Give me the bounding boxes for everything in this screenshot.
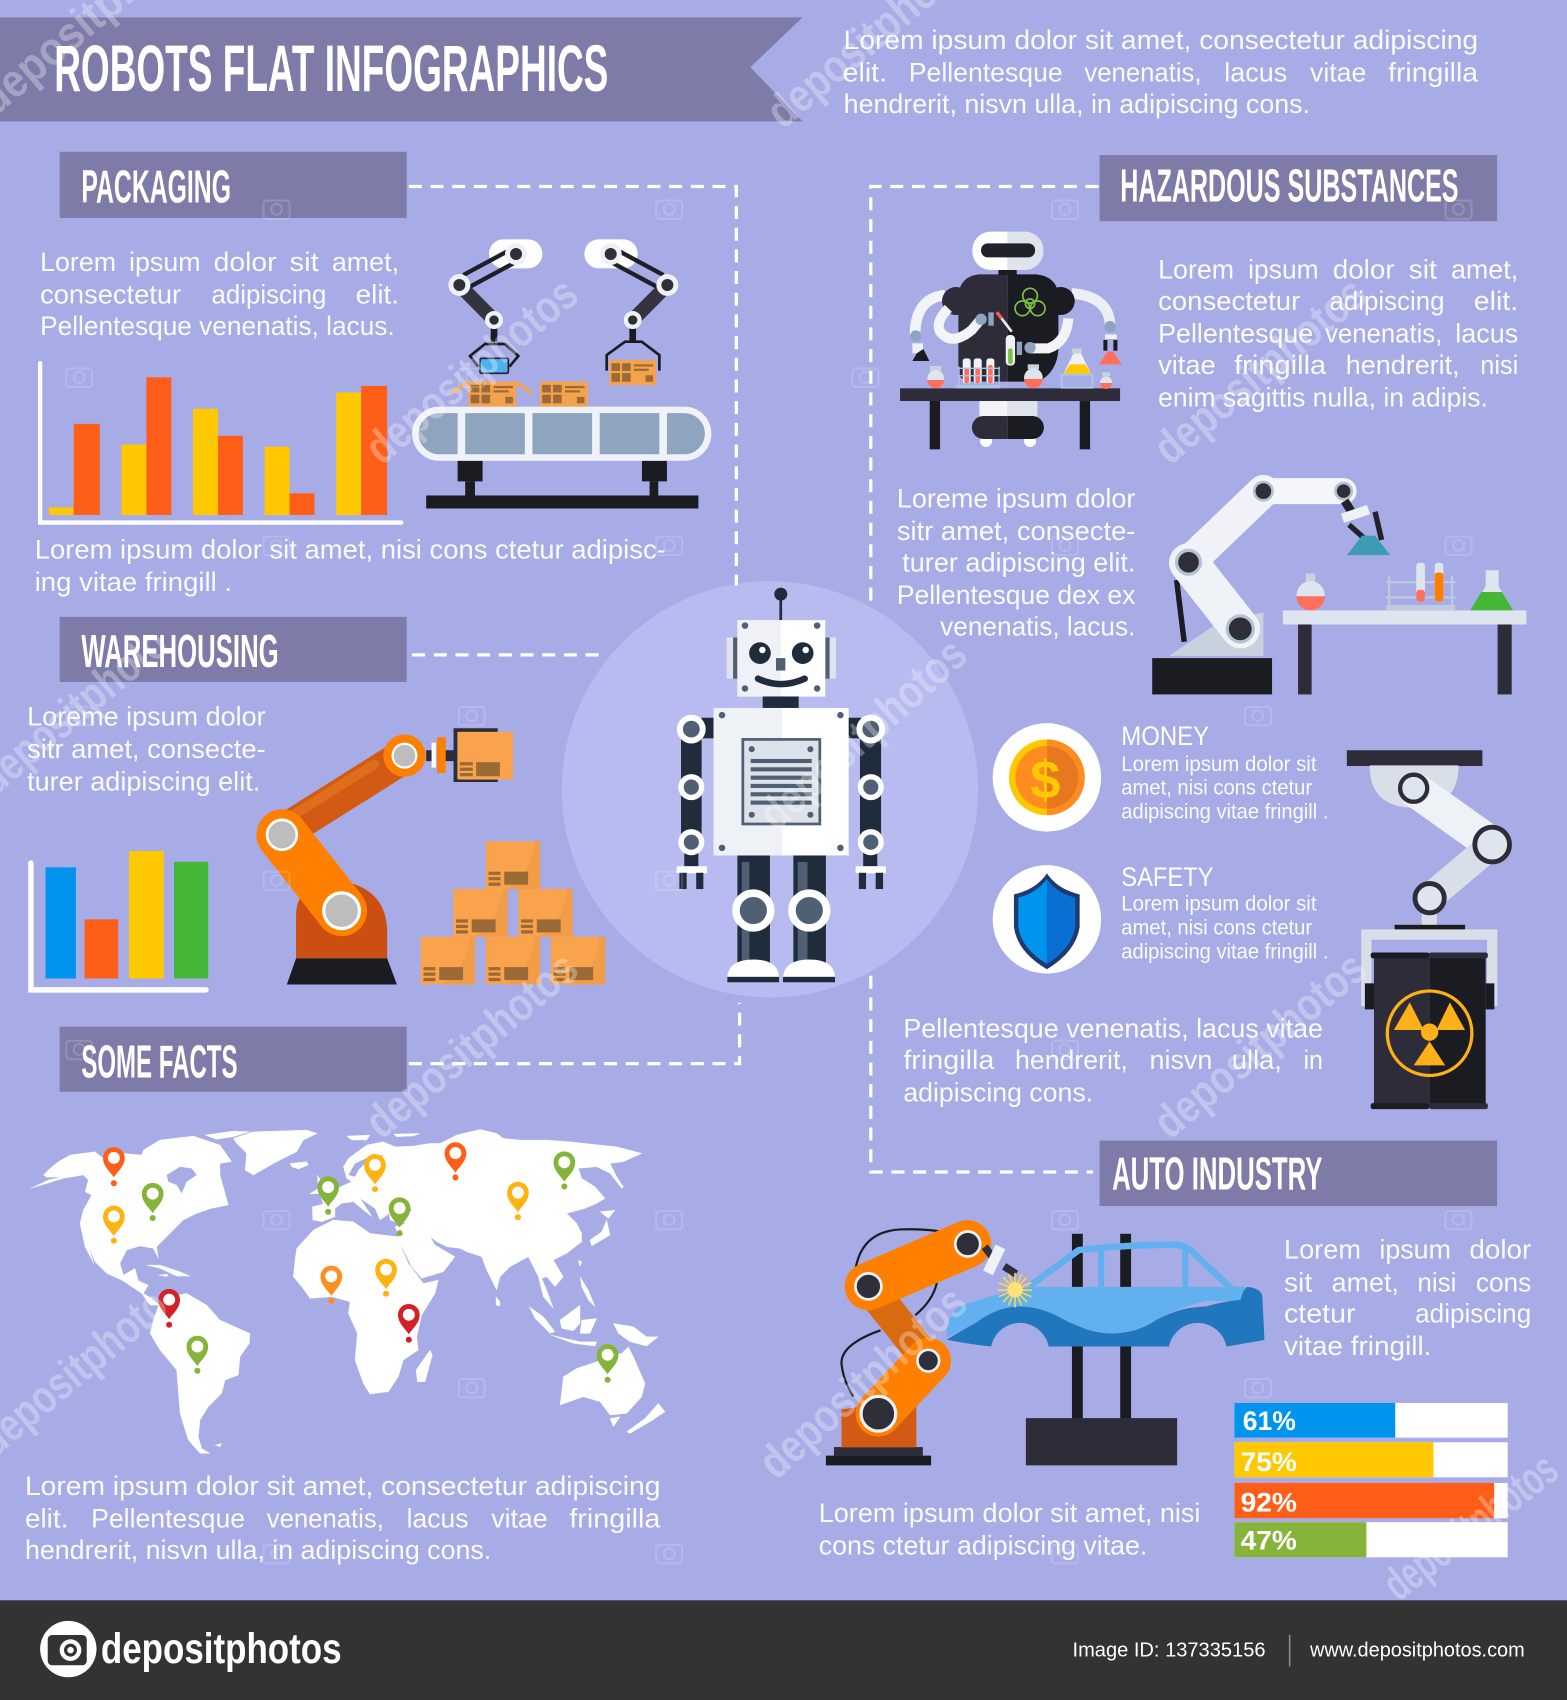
hazardous text: vitae: [1158, 349, 1216, 380]
intro text block: hendrerit, nisvn ulla, in adipiscing cons.: [844, 88, 1310, 119]
welding spark: [998, 1273, 1032, 1308]
hazardous text: consectetur: [1158, 285, 1300, 316]
safety paragraph: in: [1303, 1044, 1323, 1075]
hazardous text: Lorem: [1158, 254, 1234, 285]
intro text block: venenatis,: [1084, 56, 1202, 87]
auto text: [1284, 1234, 1531, 1361]
packaging caption: [35, 533, 666, 597]
auto text: vitae fringill.: [1284, 1330, 1431, 1361]
packaging text: [40, 246, 399, 341]
hazardous secondary text: turer adipiscing elit.: [902, 546, 1135, 577]
some facts heading: SOME FACTS: [81, 1036, 237, 1088]
facts text: [25, 1470, 661, 1565]
footer url: www.depositphotos.com: [1309, 1640, 1525, 1662]
percentage bars: [1234, 1403, 1508, 1557]
safety paragraph: adipiscing cons.: [903, 1077, 1093, 1108]
panel: hazardous substances: [897, 155, 1526, 694]
packaging text: sit: [290, 246, 319, 277]
facts text: Pellentesque: [91, 1503, 245, 1534]
safety paragraph: hendrerit,: [1015, 1044, 1128, 1075]
car body: [947, 1245, 1264, 1347]
packaging heading: [60, 152, 407, 218]
stock watermarks: depositphotos: [355, 941, 588, 1148]
hazardous text: dolor: [1333, 254, 1395, 285]
stock watermarks: depositphotos: [1143, 267, 1376, 474]
intro text block: lacus: [1224, 56, 1287, 87]
hazardous text: adipiscing: [1330, 285, 1444, 316]
footer divider: [1289, 1635, 1290, 1666]
map: americas: [31, 1130, 317, 1453]
robot torso: [714, 708, 849, 855]
auto caption: Lorem ipsum dolor sit amet, nisi: [819, 1497, 1200, 1528]
facts text: fringilla: [569, 1503, 661, 1534]
robot legs: [727, 855, 835, 982]
auto text: ipsum: [1379, 1234, 1451, 1265]
safety text: amet, nisi cons ctetur: [1121, 917, 1312, 940]
safety paragraph: ulla,: [1232, 1044, 1282, 1075]
lab robot: [910, 232, 1122, 447]
panel: auto industry: [819, 1141, 1531, 1561]
safety paragraph: Pellentesque venenatis, lacus vitae: [903, 1013, 1323, 1044]
hazardous text: Pellentesque: [1158, 318, 1313, 349]
facts text: hendrerit, nisvn ulla, in adipiscing cons.: [25, 1534, 491, 1565]
auto caption: [819, 1497, 1200, 1561]
panel: packaging: [35, 152, 708, 597]
auto text: sit: [1284, 1266, 1313, 1297]
stock watermarks: depositphotos: [1143, 941, 1376, 1148]
warehousing bar chart: [31, 851, 208, 990]
safety text: SAFETY: [1121, 861, 1213, 892]
panel: warehousing: [27, 617, 605, 990]
some facts heading: [60, 1027, 407, 1092]
hazardous secondary text: venenatis, lacus.: [940, 610, 1135, 641]
money text: adipiscing vitae fringill .: [1121, 801, 1328, 824]
stock watermarks: depositphotos: [355, 267, 588, 474]
hazardous text: amet,: [1451, 254, 1518, 285]
hazardous text: enim sagittis nulla, in adipis.: [1158, 382, 1488, 413]
intro text block: Lorem ipsum dolor sit amet, consectetur adipiscing: [844, 24, 1478, 55]
hazardous secondary text: [897, 482, 1136, 641]
central robot: [677, 588, 886, 982]
map pins: [103, 1142, 618, 1383]
lab bench with vessels: [1283, 563, 1526, 694]
warehousing text: sitr amet, consecte-: [27, 733, 266, 764]
packaging bar chart: [40, 363, 401, 523]
held box: [458, 732, 513, 780]
map: eurasia, africa and oceania: [293, 1129, 665, 1433]
title banner: [0, 17, 802, 121]
packaging text: Pellentesque venenatis, lacus.: [40, 310, 395, 341]
title: ROBOTS FLAT INFOGRAPHICS: [54, 32, 608, 106]
hazardous substances heading: [1100, 155, 1497, 221]
antenna: [774, 588, 787, 620]
auto text: nisi: [1417, 1266, 1456, 1297]
warehousing text: turer adipiscing elit.: [27, 765, 260, 796]
left packaging robot arm: [448, 239, 542, 373]
auto industry heading: AUTO INDUSTRY: [1112, 1147, 1322, 1199]
facts text: Lorem ipsum dolor sit amet, consectetur adipiscing: [25, 1470, 660, 1501]
intro text block: Pellentesque: [909, 56, 1063, 87]
radioactive barrel robot: [1347, 750, 1510, 1109]
hazardous text: hendrerit,: [1346, 349, 1460, 380]
safety paragraph: nisvn: [1149, 1044, 1212, 1075]
packaging text: amet,: [332, 246, 399, 277]
auto text: ctetur: [1284, 1298, 1356, 1329]
money icon: [993, 723, 1101, 832]
money text: [1121, 720, 1328, 824]
footer logo icon: [40, 1621, 97, 1677]
safety icon: [993, 865, 1101, 974]
hazardous text: [1158, 254, 1518, 413]
packaging caption: ing vitae fringill .: [35, 566, 232, 597]
hazardous text: nisi: [1480, 349, 1518, 380]
hazardous text: elit.: [1474, 285, 1518, 316]
intro text block: elit.: [843, 56, 887, 87]
percentage bars: 92%: [1241, 1486, 1297, 1517]
right packaging robot arm: [584, 239, 678, 385]
money text: amet, nisi cons ctetur: [1121, 777, 1312, 800]
facts text: lacus: [407, 1503, 468, 1534]
packaging heading: PACKAGING: [81, 161, 231, 213]
money text: Lorem ipsum dolor sit: [1121, 753, 1317, 776]
auto text: adipiscing: [1415, 1298, 1531, 1329]
safety text: Lorem ipsum dolor sit: [1121, 893, 1317, 916]
percentage bars: 75%: [1241, 1446, 1297, 1477]
hazardous secondary text: Pellentesque dex ex: [897, 579, 1136, 610]
percentage bars: 47%: [1241, 1524, 1297, 1555]
money text: MONEY: [1121, 720, 1209, 751]
money icon: $: [1030, 750, 1060, 810]
hazardous text: venenatis,: [1325, 318, 1442, 349]
warehousing text: Loreme ipsum dolor: [27, 700, 266, 731]
footer logo text: depositphotos: [101, 1625, 342, 1672]
facts text: venenatis,: [267, 1503, 384, 1534]
hazardous text: lacus: [1455, 318, 1518, 349]
intro text block: vitae: [1310, 56, 1366, 87]
intro text block: fringilla: [1388, 56, 1479, 87]
auto text: cons: [1476, 1266, 1531, 1297]
orange warehouse robot arm: [266, 730, 498, 984]
auto text: amet,: [1332, 1266, 1399, 1297]
panel: money: [993, 720, 1328, 832]
facts text: elit.: [25, 1503, 68, 1534]
footer image id: Image ID: 137335156: [1073, 1640, 1266, 1662]
auto text: Lorem: [1284, 1234, 1361, 1265]
hazardous text: sit: [1409, 254, 1437, 285]
panel: safety: [993, 861, 1328, 974]
warehousing heading: WAREHOUSING: [81, 625, 279, 677]
robot arms: [677, 718, 886, 889]
facts text: vitae: [491, 1503, 548, 1534]
radioactive barrel: [1365, 952, 1494, 1109]
conveyor belt: [415, 410, 708, 508]
warehousing heading: [60, 617, 407, 682]
footer bar: [0, 1600, 1567, 1700]
auto text: dolor: [1469, 1234, 1531, 1265]
hazardous text: ipsum: [1248, 254, 1319, 285]
robot neck: [763, 696, 799, 708]
hazardous secondary text: Loreme ipsum dolor: [897, 482, 1135, 513]
welding robot arm: [826, 1229, 1016, 1465]
lab table and flasks: [900, 348, 1120, 449]
box stack: [421, 841, 605, 984]
packaging text: Lorem: [40, 246, 116, 277]
stock watermarks: depositphotos: [748, 1276, 977, 1488]
safety paragraph: [903, 1013, 1323, 1108]
central circle backdrop: [562, 581, 978, 997]
packaging text: elit.: [356, 279, 399, 310]
packaging text: ipsum: [129, 246, 201, 277]
car stand: [1026, 1234, 1177, 1465]
auto caption: cons ctetur adipiscing vitae.: [819, 1530, 1147, 1561]
packaging text: dolor: [214, 246, 277, 277]
white lab robot arm: [1152, 482, 1390, 694]
dashed connectors: [409, 186, 1099, 1172]
packaging text: adipiscing: [211, 279, 326, 310]
barrel gantry arm: [1347, 750, 1510, 1006]
hazardous secondary text: sitr amet, consecte-: [897, 515, 1135, 546]
safety text: adipiscing vitae fringill .: [1121, 940, 1328, 963]
hazardous text: fringilla: [1234, 349, 1327, 380]
safety text: [1121, 861, 1328, 963]
percentage bars: 61%: [1243, 1405, 1296, 1436]
world map: [31, 1129, 665, 1453]
packaging text: consectetur: [40, 279, 181, 310]
intro text block: [843, 24, 1479, 119]
boxes on conveyor: [451, 382, 588, 407]
warehousing text: [27, 700, 266, 796]
robot head: [727, 620, 836, 697]
stock watermarks: depositphotos: [748, 627, 977, 840]
small camera watermarks: [66, 201, 1472, 1563]
panel: some facts: [25, 1027, 665, 1565]
safety paragraph: fringilla: [903, 1044, 995, 1075]
packaging caption: Lorem ipsum dolor sit amet, nisi cons ctetur adipisc-: [35, 533, 666, 564]
